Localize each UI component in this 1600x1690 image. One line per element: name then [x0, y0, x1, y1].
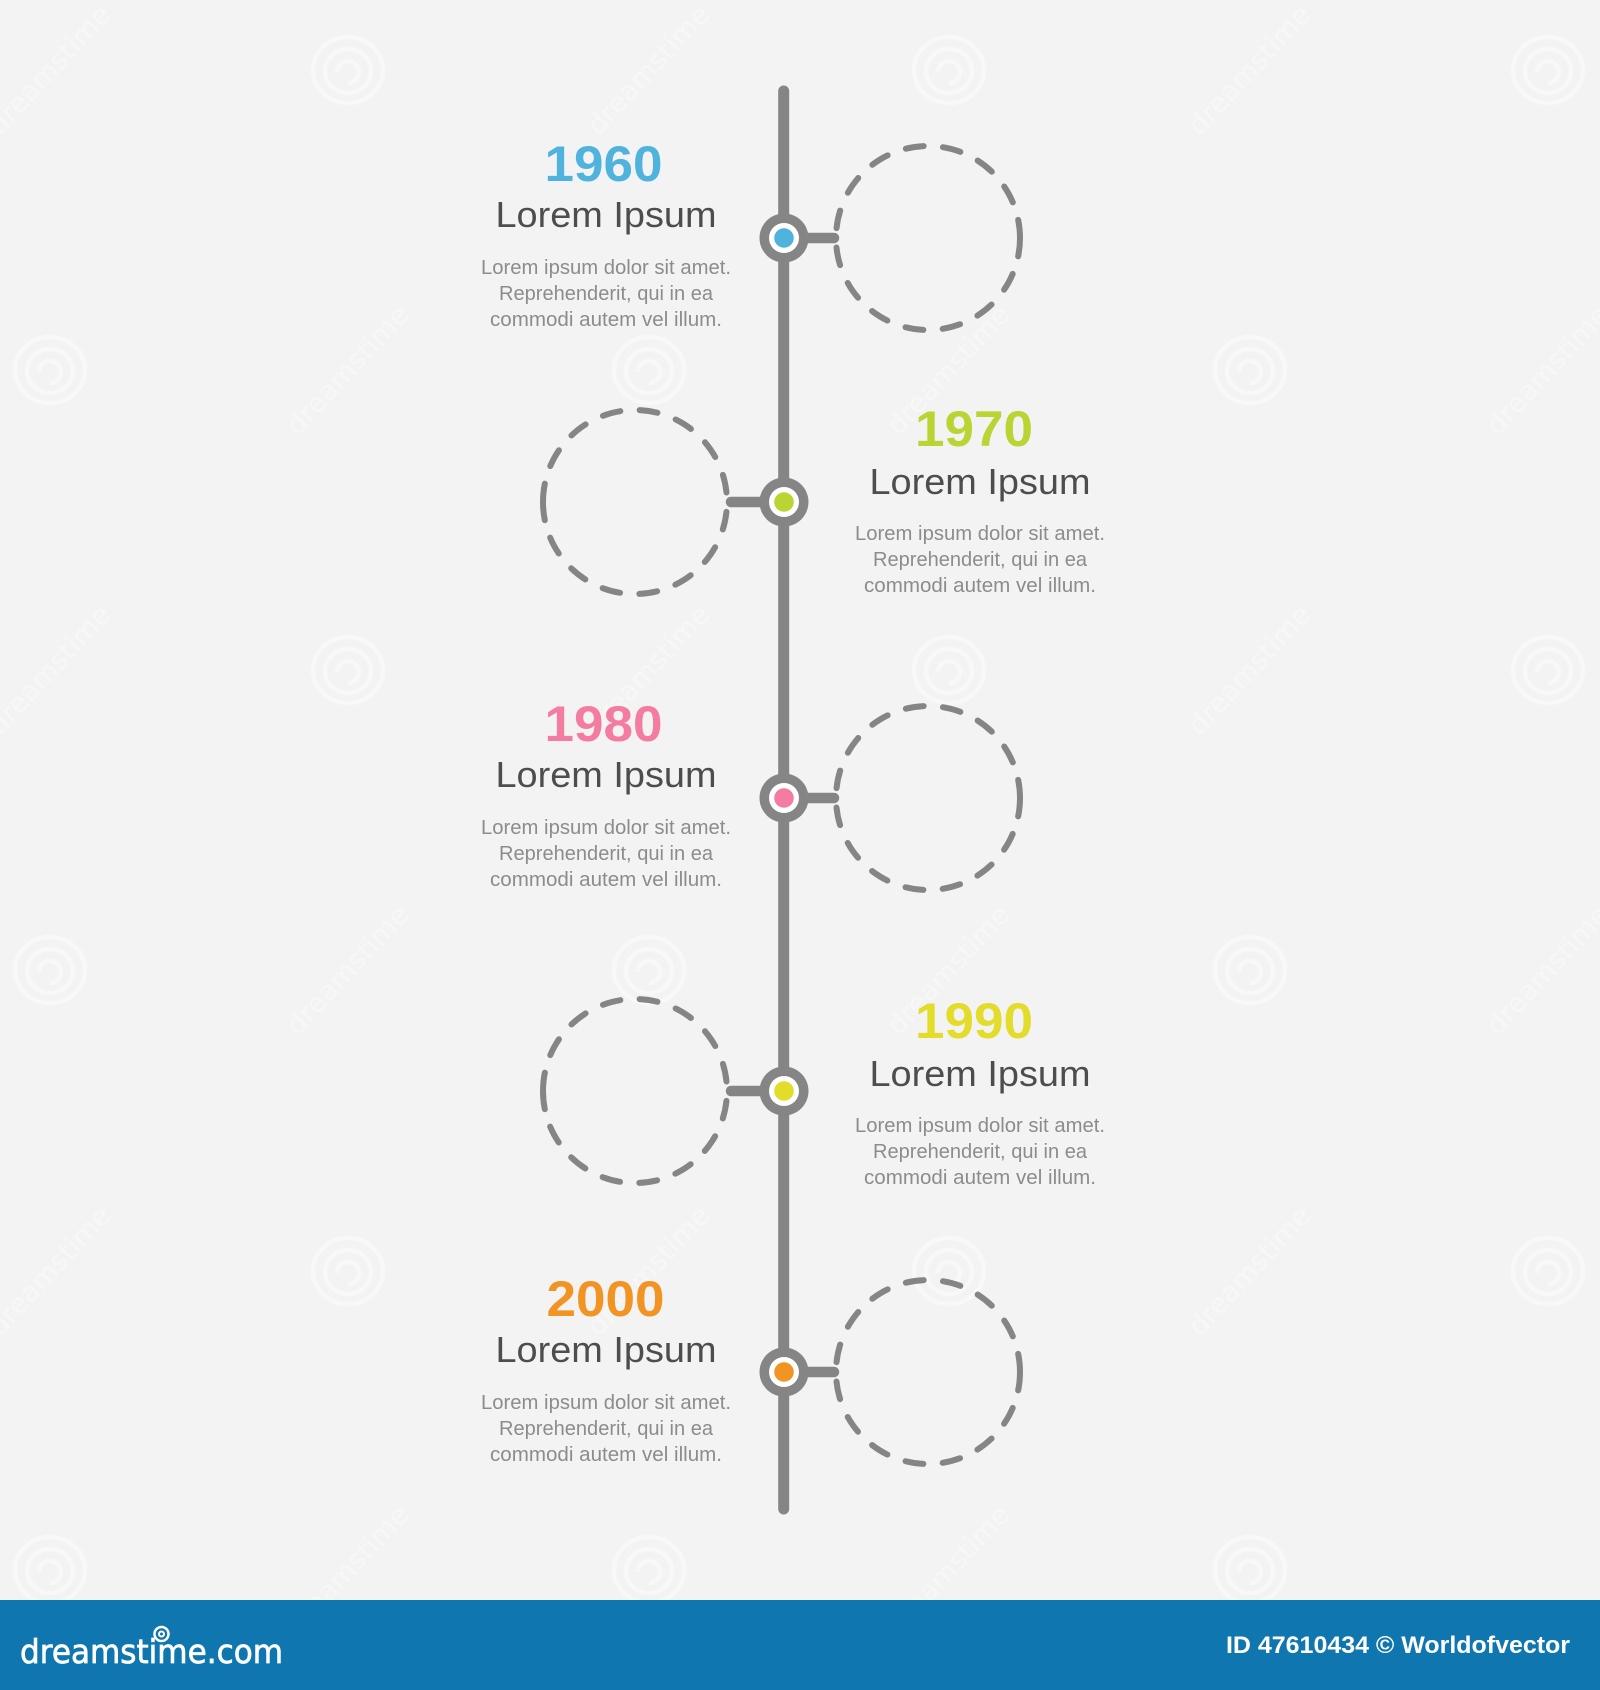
- description: Reprehenderit, qui in ea: [499, 1418, 714, 1440]
- watermark pattern: dreamstime: [1182, 1200, 1317, 1342]
- year: 1960: 1960: [544, 136, 662, 192]
- timeline node: [760, 478, 808, 526]
- milestone: 1970: [543, 401, 1105, 597]
- watermark pattern: dreamstime: [581, 599, 716, 741]
- dashed image circle: [543, 410, 727, 594]
- heading: Lorem Ipsum: [870, 461, 1090, 502]
- description: [481, 257, 731, 331]
- watermark pattern: dreamstime: [881, 299, 1016, 441]
- description: Reprehenderit, qui in ea: [499, 843, 714, 865]
- heading: Lorem Ipsum: [496, 754, 716, 795]
- description: Lorem ipsum dolor sit amet.: [481, 257, 731, 279]
- connector: [784, 793, 834, 803]
- watermark pattern: dreamstime: [280, 1499, 415, 1641]
- timeline vertical line: [778, 91, 789, 1509]
- connector: [731, 497, 784, 507]
- watermark pattern: dreamstime: [280, 299, 415, 441]
- watermark pattern: dreamstime: [581, 0, 716, 141]
- footer bar: [0, 1600, 1600, 1690]
- watermark pattern: dreamstime: [1182, 0, 1317, 141]
- description: commodi autem vel illum.: [864, 1167, 1096, 1189]
- watermark pattern: dreamstime: [881, 899, 1016, 1041]
- description: commodi autem vel illum.: [490, 869, 722, 891]
- heading: Lorem Ipsum: [496, 194, 716, 235]
- watermark pattern: dreamstime: [581, 1200, 716, 1342]
- footer logo: dreamstime.com: dreamstime.com: [20, 1632, 283, 1671]
- milestone: 1960: [481, 136, 1020, 331]
- year: 1980: 1980: [544, 696, 662, 752]
- milestone: 1980: [481, 696, 1020, 891]
- timeline node: [760, 774, 808, 822]
- year: 2000: 2000: [546, 1271, 664, 1327]
- heading: Lorem Ipsum: [496, 1329, 716, 1370]
- description: commodi autem vel illum.: [864, 575, 1096, 597]
- description: Reprehenderit, qui in ea: [873, 1141, 1088, 1163]
- dashed image circle: [836, 1280, 1020, 1464]
- description: Lorem ipsum dolor sit amet.: [481, 817, 731, 839]
- description: commodi autem vel illum.: [490, 309, 722, 331]
- milestone: 2000: [481, 1271, 1020, 1466]
- year: 1990: 1990: [915, 993, 1033, 1049]
- timeline node: [760, 1348, 808, 1396]
- footer credit: ID 47610434 © Worldofvector: [1226, 1632, 1570, 1659]
- description: [481, 817, 731, 891]
- timeline node: [760, 1066, 808, 1116]
- connector: [731, 1086, 784, 1096]
- watermark pattern: dreamstime: [280, 899, 415, 1041]
- description: Lorem ipsum dolor sit amet.: [481, 1392, 731, 1414]
- milestone: 1990: [543, 993, 1105, 1189]
- heading: Lorem Ipsum: [870, 1053, 1090, 1094]
- description: Lorem ipsum dolor sit amet.: [855, 1115, 1105, 1137]
- year: 1970: 1970: [915, 401, 1033, 457]
- dashed image circle: [836, 146, 1020, 330]
- watermark pattern: dreamstime: [881, 1499, 1016, 1641]
- description: [855, 523, 1105, 597]
- description: [855, 1115, 1105, 1189]
- timeline node: [760, 214, 808, 262]
- connector: [784, 1367, 834, 1377]
- description: commodi autem vel illum.: [490, 1444, 722, 1466]
- dashed image circle: [836, 706, 1020, 890]
- description: Lorem ipsum dolor sit amet.: [855, 523, 1105, 545]
- dashed image circle: [543, 999, 727, 1183]
- description: Reprehenderit, qui in ea: [873, 549, 1088, 571]
- connector: [784, 233, 834, 243]
- description: Reprehenderit, qui in ea: [499, 283, 714, 305]
- icon: logo swirl: [154, 1627, 168, 1641]
- watermark pattern: dreamstime: [1182, 599, 1317, 741]
- description: [481, 1392, 731, 1466]
